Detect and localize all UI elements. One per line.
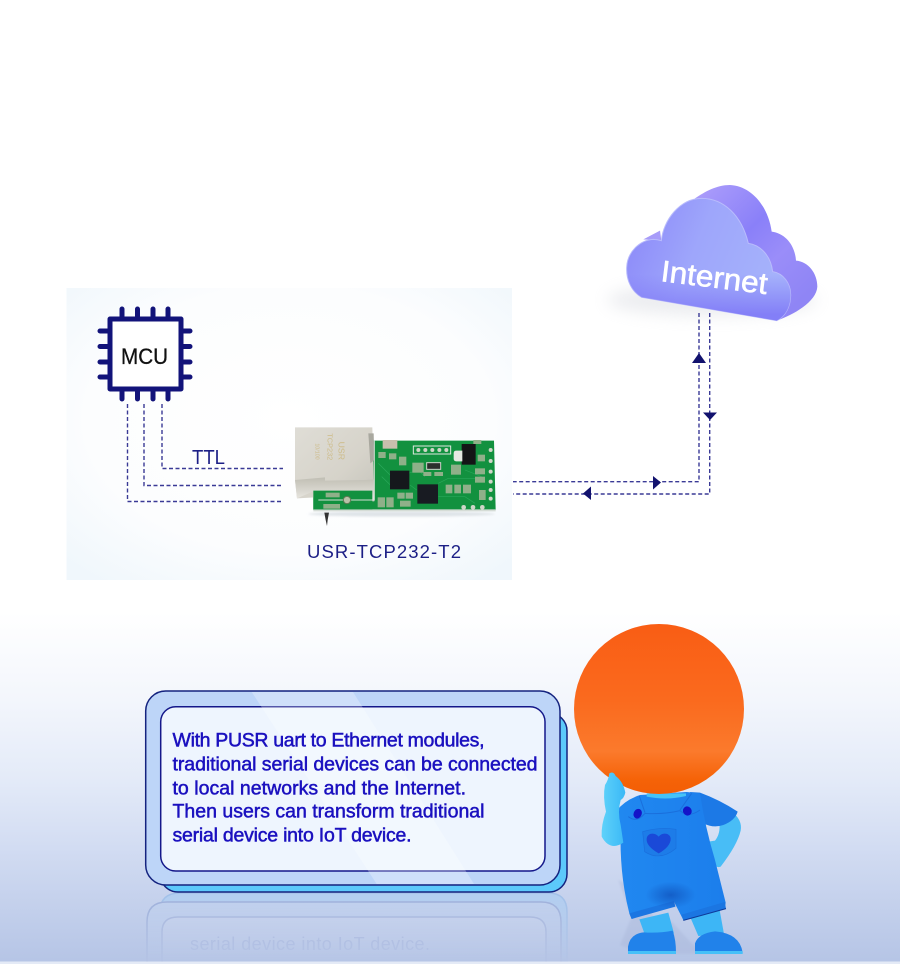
serial wiring lines (128, 404, 283, 502)
overall cuffs (629, 901, 726, 920)
arrow: up to cloud (692, 353, 706, 363)
icon: MCU chip (100, 309, 190, 399)
callout text: to local networks and the Internet. (172, 777, 466, 799)
callout text: traditional serial devices can be connected (172, 754, 538, 776)
shoes (628, 931, 743, 954)
network connection lines (513, 313, 710, 494)
raised arm (602, 772, 625, 846)
icon: Internet cloud (627, 185, 817, 321)
cloud shadow (607, 284, 817, 316)
buttons (632, 805, 693, 820)
pocket (643, 828, 676, 856)
product photo: USR-TCP232-T2 module (295, 427, 496, 526)
sleeve (690, 792, 738, 826)
character: mascot with orange head (574, 624, 744, 954)
ground shadow (618, 880, 733, 954)
head (574, 624, 744, 794)
product photo: USR-TCP232-T2 module: TCP232 (326, 433, 335, 460)
heart (647, 834, 671, 853)
arrow: right toward cloud (653, 476, 661, 490)
right arm on hip (708, 812, 741, 867)
neck (647, 793, 686, 799)
panel: MCU to module wiring diagram (66, 288, 512, 580)
callout text: Then users can transform traditional (172, 801, 484, 823)
callout reflection: serial device into IoT device. (190, 934, 430, 954)
overalls (617, 792, 726, 920)
legs (639, 908, 724, 936)
arrow: left toward module (583, 486, 591, 500)
callout text: serial device into IoT device. (172, 825, 412, 847)
mascot body (617, 792, 743, 954)
label: Internet: Internet (659, 255, 770, 301)
icon: MCU chip: MCU (121, 344, 168, 369)
product photo: USR-TCP232-T2 module: USR (336, 442, 346, 460)
callout text: With PUSR uart to Ethernet modules, (172, 730, 484, 752)
straps (628, 793, 700, 819)
callout text (172, 730, 538, 847)
callout reflection (146, 892, 568, 949)
product photo: USR-TCP232-T2 module: 10/100 (314, 443, 320, 460)
label: product name: USR-TCP232-T2 (307, 541, 461, 562)
label: TTL: TTL (192, 447, 225, 469)
arrow: down from cloud (703, 412, 717, 420)
callout: description box (146, 691, 567, 892)
crotch shading (646, 882, 696, 908)
